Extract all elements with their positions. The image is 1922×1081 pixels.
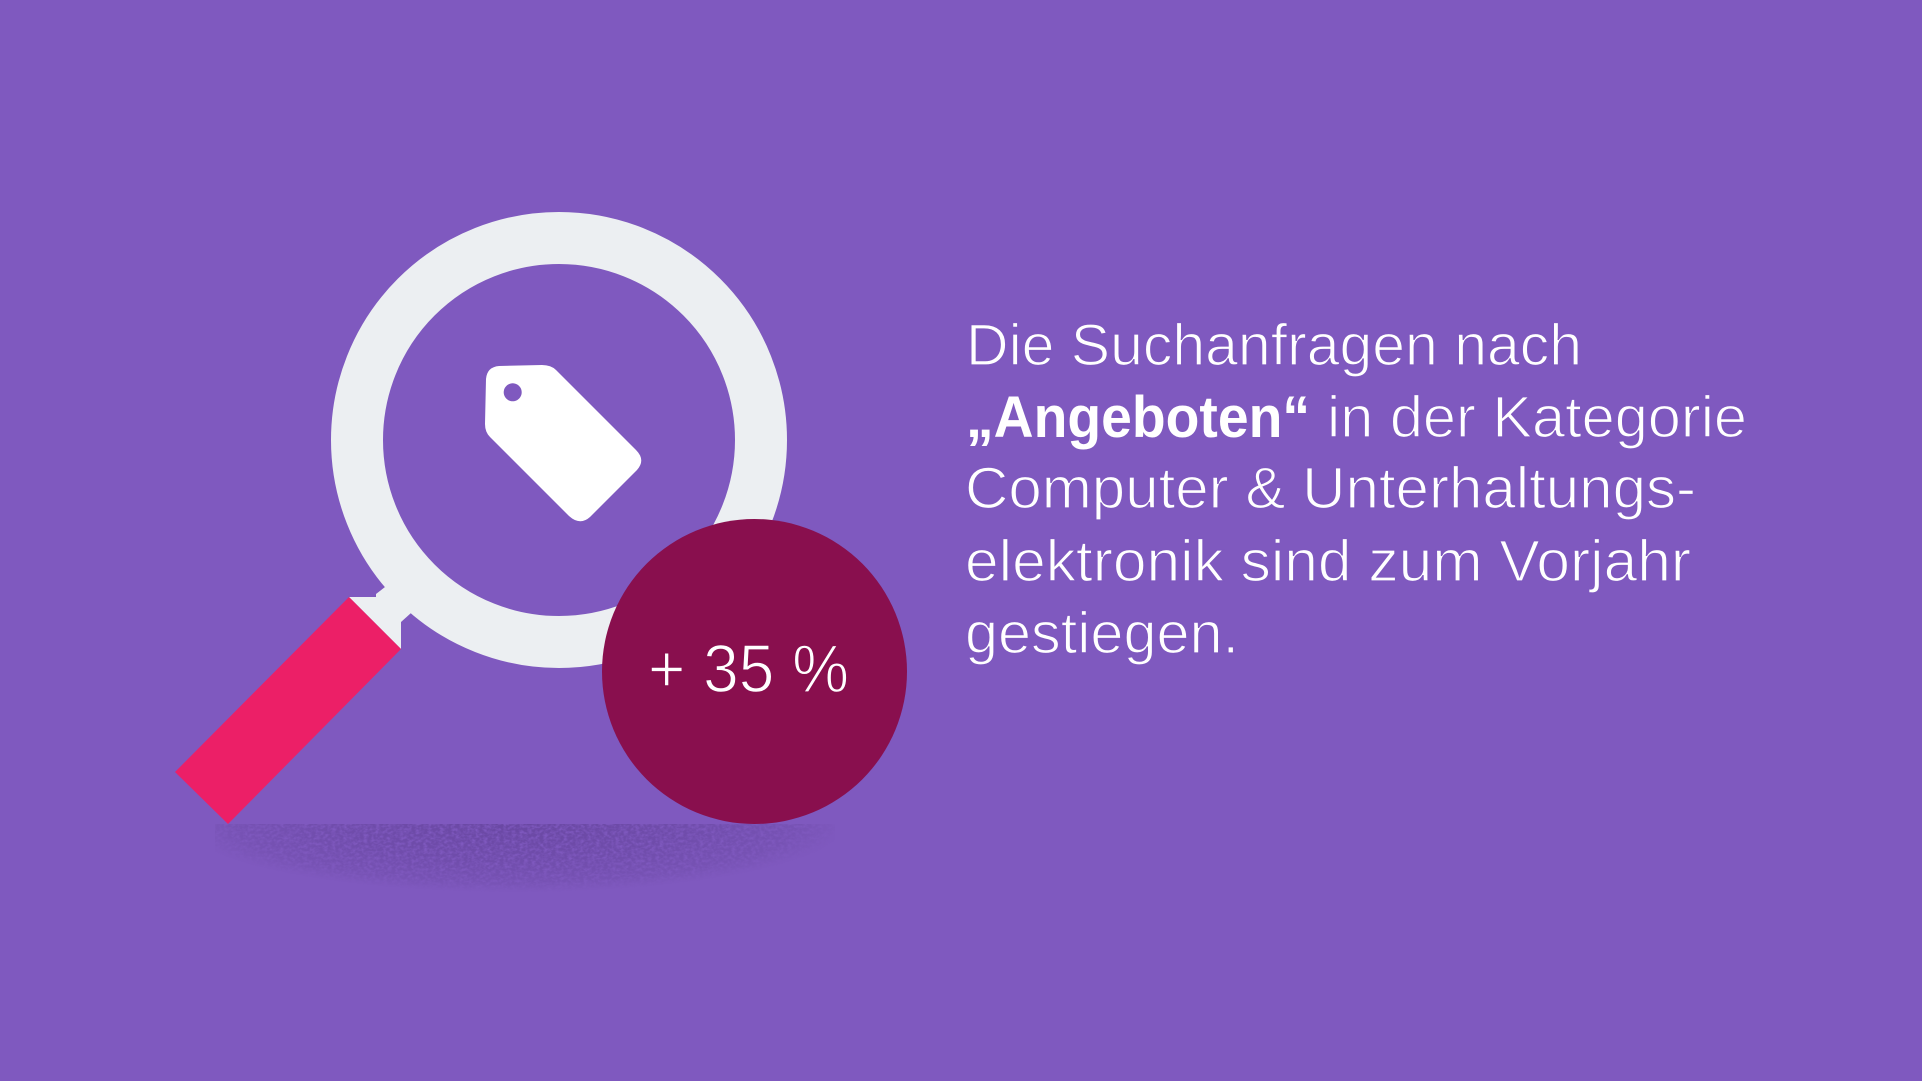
handle connector: [349, 587, 411, 649]
line 5: gestiegen.: [965, 601, 1239, 666]
line 3: Computer & Unterhaltungs-: [965, 456, 1696, 521]
icon: price tag: [485, 365, 641, 521]
handle: [175, 597, 401, 824]
line 4: elektronik sind zum Vorjahr: [965, 529, 1691, 594]
infographic canvas: [175, 212, 1744, 885]
lens ring: [357, 238, 761, 642]
badge: plus 35 percent: [602, 519, 907, 824]
line 1: Die Suchanfragen nach: [966, 313, 1582, 378]
ground shadow: [222, 824, 811, 885]
line 2 bold: „Angeboten“: [966, 385, 1310, 450]
line 2 regular: in der Kategorie: [1327, 385, 1747, 450]
badge value: + 35 %: [648, 631, 849, 707]
text block: description: [965, 313, 1747, 666]
icon: magnifying glass: [175, 238, 761, 824]
